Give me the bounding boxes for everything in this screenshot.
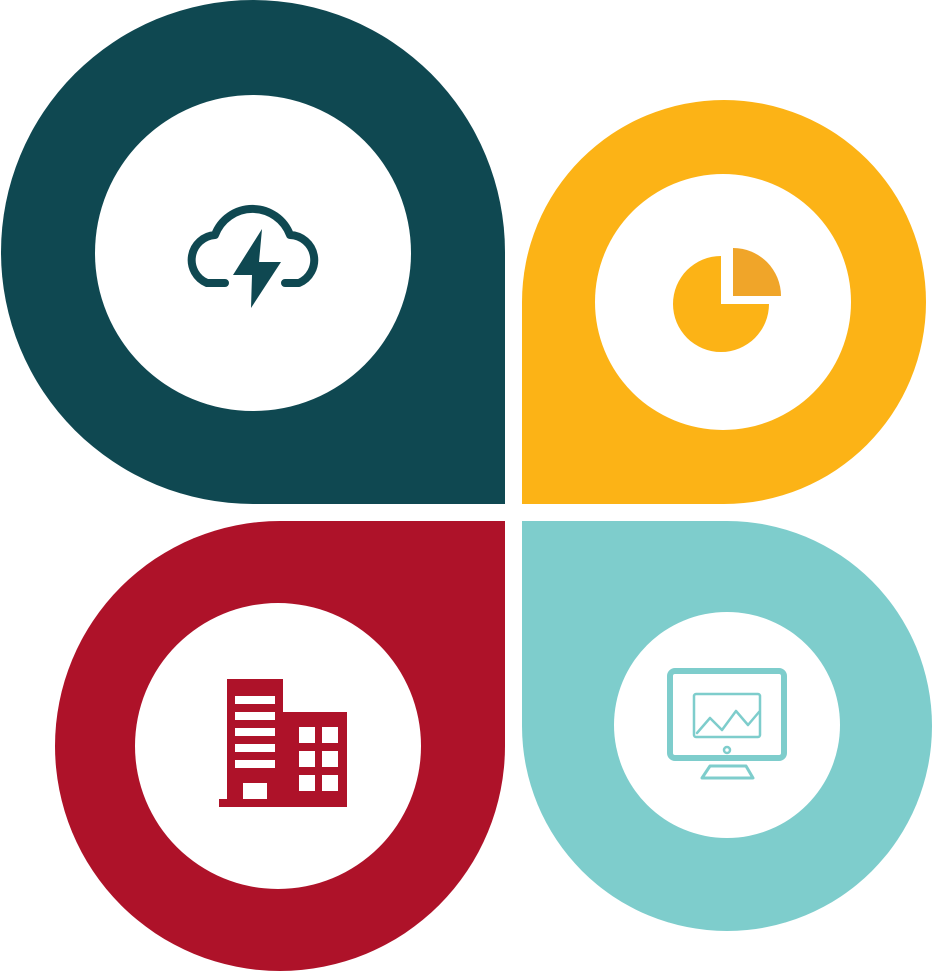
icon: cloud with lightning xyxy=(192,209,314,308)
icon: pie chart xyxy=(673,248,781,352)
icon: monitor with chart xyxy=(670,671,784,778)
panel: bottom-left red teardrop xyxy=(55,521,505,971)
panel: top-right yellow teardrop xyxy=(522,100,926,504)
panel: top-left dark teal teardrop xyxy=(1,0,505,504)
panel: bottom-right light teal teardrop xyxy=(522,521,932,931)
icon: office building xyxy=(219,679,347,807)
